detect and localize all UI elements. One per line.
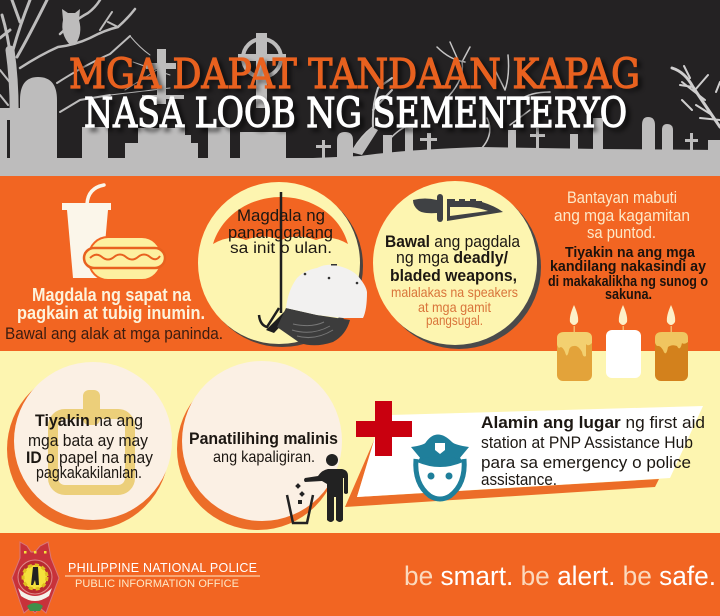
panel: cream band xyxy=(0,351,720,533)
text: ID note: ID o papel na may xyxy=(26,448,153,467)
text: cleanliness note: ang kapaligiran. xyxy=(213,449,315,466)
text: organization name: PUBLIC INFORMATION OFFICE xyxy=(75,578,239,590)
text: candle safety note xyxy=(548,245,708,303)
text: candle safety note: kandilang nakasindi ay xyxy=(550,259,706,275)
text: belongings note: ang mga kagamitan xyxy=(554,206,690,225)
text: assistance note xyxy=(481,413,705,489)
text: belongings note: sa puntod. xyxy=(587,223,656,242)
icon: person using trash bin xyxy=(287,454,348,523)
text: weapons note xyxy=(385,232,520,328)
text: weapons note: bladed weapons, xyxy=(390,266,517,285)
text: weapons note: Bawal ang pagdala xyxy=(385,232,520,251)
panel: belongings and candles xyxy=(548,188,708,381)
panel: assistance banner xyxy=(345,401,705,507)
text: cleanliness note xyxy=(189,429,338,466)
icon: ID tag xyxy=(53,390,130,490)
icon: police officer xyxy=(411,434,469,499)
panel: food and drink xyxy=(5,185,223,343)
icon: candle left xyxy=(557,305,592,381)
text: food note xyxy=(5,285,223,343)
icon: red cross xyxy=(356,401,412,456)
text: umbrella note: pananggalang xyxy=(228,223,333,242)
text: umbrella note xyxy=(228,206,333,257)
text: food note: Magdala ng sapat na xyxy=(32,285,192,305)
icon: cap xyxy=(277,264,367,345)
icon: PNP seal xyxy=(12,542,59,613)
text: ID note: mga bata ay may xyxy=(28,431,148,450)
text: food note: Bawal ang alak at mga paninda. xyxy=(5,324,223,343)
icon: drink cup xyxy=(62,185,111,278)
right tree xyxy=(672,66,720,127)
icon: hot dog xyxy=(84,237,165,280)
text: weapons note: pangsugal. xyxy=(426,312,483,328)
text: organization name: PHILIPPINE NATIONAL POLICE xyxy=(68,561,257,575)
distant trees xyxy=(353,42,550,150)
text: assistance note: para sa emergency o police xyxy=(481,453,691,472)
text: weapons note: at mga gamit xyxy=(418,299,491,315)
icon: candle right xyxy=(655,305,688,381)
panel: weapons circle xyxy=(373,181,541,349)
graveyard silhouette xyxy=(0,33,720,176)
text: tagline: be smart. be alert. be safe. xyxy=(404,561,716,591)
title xyxy=(69,50,644,141)
text: assistance note: assistance. xyxy=(481,470,557,489)
text: organization name xyxy=(65,561,260,590)
text: umbrella note: Magdala ng xyxy=(237,206,325,225)
icon: knife xyxy=(413,194,503,222)
title: MGA DAPAT TANDAAN KAPAG xyxy=(69,50,640,98)
panel: orange band xyxy=(0,176,720,351)
panel: umbrella circle xyxy=(198,182,367,347)
title: MGA DAPAT TANDAAN KAPAG xyxy=(73,53,644,101)
icon: candle middle xyxy=(606,305,641,378)
text: assistance note: station at PNP Assistance Hub xyxy=(481,433,693,452)
text: food note: pagkain at tubig inumin. xyxy=(17,303,205,323)
text: assistance note: Alamin ang lugar ng first aid xyxy=(481,413,705,432)
text: belongings note: Bantayan mabuti xyxy=(567,188,677,207)
panel: cleanliness circle xyxy=(177,361,342,530)
icon: umbrella xyxy=(213,192,348,333)
text: ID note: Tiyakin na ang xyxy=(35,411,143,430)
text: umbrella note: sa init o ulan. xyxy=(230,240,332,257)
tree and owl xyxy=(0,0,170,125)
text: candle safety note: sakuna. xyxy=(605,287,652,303)
text: weapons note: malalakas na speakers xyxy=(391,284,518,300)
text: belongings note xyxy=(554,188,690,242)
text: weapons note: ng mga deadly/ xyxy=(396,248,508,267)
header background xyxy=(0,0,720,177)
panel: ID circle xyxy=(7,362,172,530)
text: candle safety note: Tiyakin na ang mga xyxy=(565,245,696,261)
text: ID note: pagkakakilanlan. xyxy=(36,463,142,482)
panel: footer xyxy=(0,533,720,616)
text: ID note xyxy=(26,411,153,482)
text: cleanliness note: Panatilihing malinis xyxy=(189,429,338,448)
